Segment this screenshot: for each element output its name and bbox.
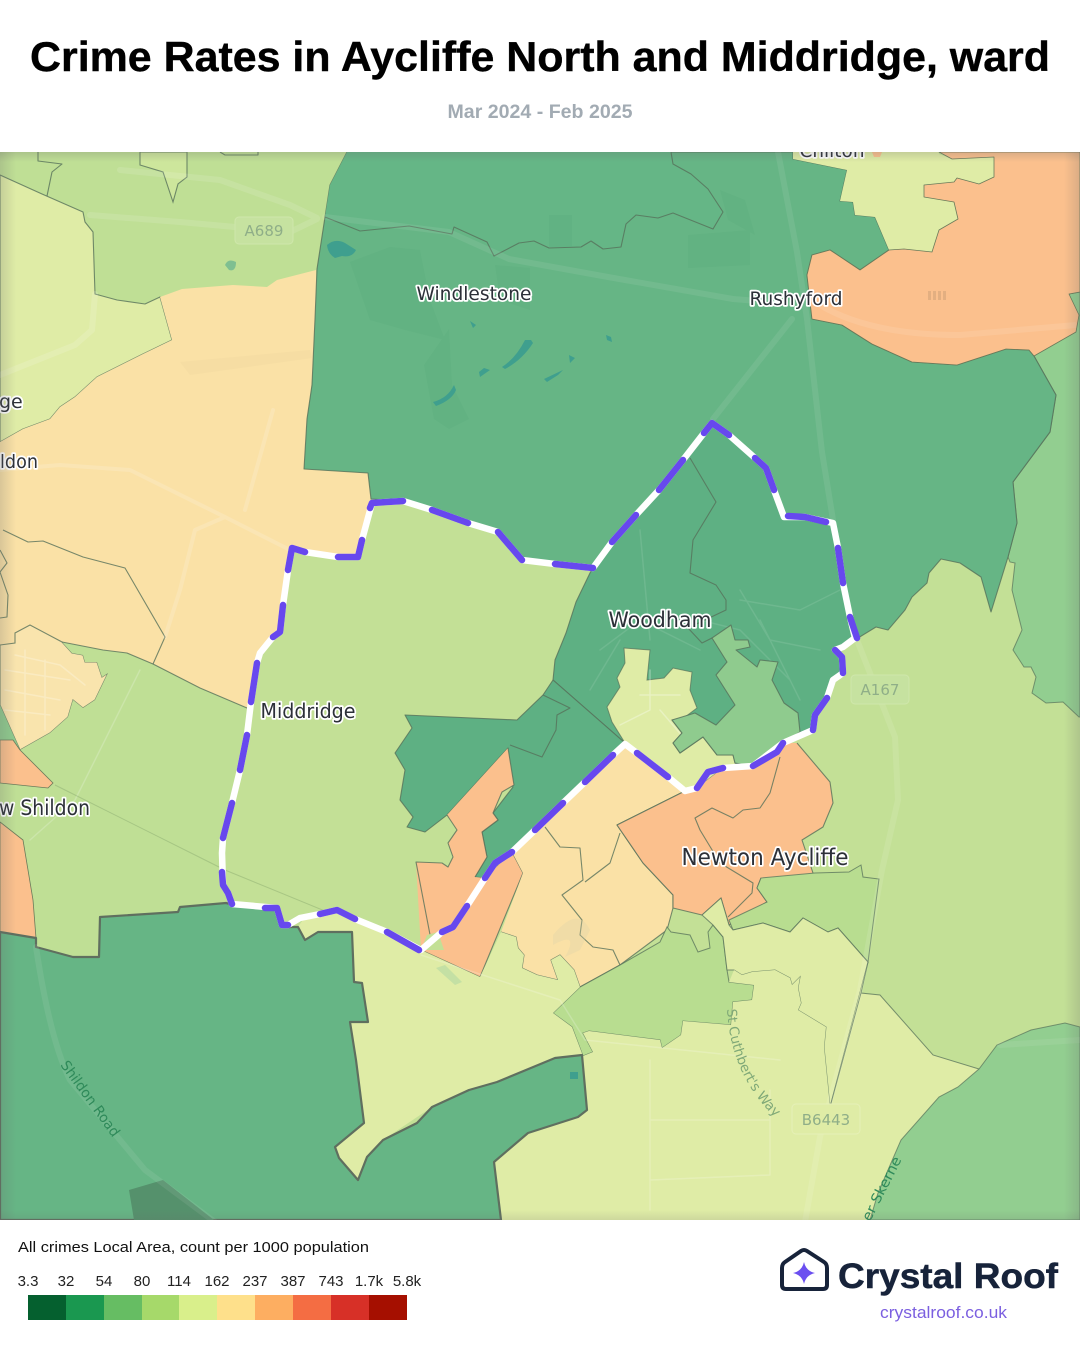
boundary white line — [222, 423, 855, 950]
place label: Newton Aycliffe: Newton Aycliffe — [682, 845, 848, 871]
area: Woodham mid green — [672, 625, 800, 766]
area: Woodham dark green — [553, 422, 855, 791]
legend tick labels — [18, 1273, 422, 1290]
area: south pale — [298, 898, 979, 1220]
map edge fade — [0, 152, 1080, 1220]
road badge: B6443: B6443 — [802, 1111, 850, 1129]
area: north dark green (Windlestone) — [304, 152, 1056, 638]
legend — [18, 1239, 422, 1320]
legend tick labels: 387 — [280, 1273, 306, 1290]
ward boundary: Aycliffe North and Middridge — [222, 423, 857, 950]
legend tick labels: 32 — [58, 1273, 74, 1290]
area: small orange patches at west edge — [0, 740, 53, 938]
area: Newton Aycliffe cream — [501, 743, 685, 987]
road: A167 corridor — [805, 640, 898, 1222]
area: south centre mid green — [553, 865, 879, 1056]
road badge: A689: A689 — [245, 222, 283, 240]
place label: Chilton: Chilton — [800, 140, 864, 162]
area: south-west dark green — [0, 903, 587, 1222]
area: Woodham dark green south-west — [395, 680, 625, 878]
logo url: crystalroof.co.uk — [880, 1304, 1008, 1322]
place label: clipped west ldon: ldon — [0, 451, 38, 473]
area: north-east pale — [793, 152, 994, 252]
legend tick labels: 1.7k — [355, 1273, 384, 1290]
legend tick labels: 237 — [242, 1273, 268, 1290]
legend colour scale — [28, 1295, 407, 1320]
river name: Skerne: er Skerne — [859, 1154, 905, 1224]
boundary purple dashes — [222, 423, 857, 950]
legend tick labels: 54 — [96, 1273, 112, 1290]
area: west street-patterned cream — [0, 625, 108, 750]
area: south-east mid green — [870, 1023, 1080, 1220]
area: east mid green — [1008, 292, 1080, 717]
icon: house with star — [782, 1250, 827, 1289]
road badge: A167 — [851, 675, 909, 704]
area: north-east orange (Rushyford) — [807, 152, 1080, 365]
legend tick labels: 80 — [134, 1273, 150, 1290]
logo wordmark: Crystal Roof — [838, 1257, 1058, 1296]
area: west light green (New Shildon) — [20, 642, 324, 910]
legend tick labels: 743 — [318, 1273, 344, 1290]
area: Newton Aycliffe orange west — [416, 748, 523, 977]
legend tick labels: 114 — [167, 1273, 191, 1290]
area: west pale band — [0, 175, 172, 442]
place label: Woodham: Woodham — [608, 608, 712, 632]
road name: Shildon Road: Shildon Road — [57, 1058, 123, 1140]
place label: Windlestone: Windlestone — [416, 283, 532, 305]
road badge: B6443 — [792, 1104, 860, 1134]
area: small mid green at west edge — [0, 705, 20, 750]
road badge: A689 — [235, 217, 293, 244]
logo: Crystal Roof — [782, 1250, 1058, 1322]
area: Woodham pale — [606, 648, 737, 788]
legend title: All crimes Local Area, count per 1000 population — [18, 1239, 369, 1256]
road badge: A167: A167 — [861, 681, 899, 699]
area: west cream — [0, 270, 371, 708]
place label: Rushyford: Rushyford — [750, 288, 842, 310]
legend tick labels: 162 — [204, 1273, 230, 1290]
place label: Middridge: Middridge — [260, 699, 356, 723]
subtitle: date range: Mar 2024 - Feb 2025 — [448, 102, 633, 123]
area: north-west light green — [37, 152, 320, 270]
legend tick labels: 3.3 — [18, 1273, 38, 1290]
area: Newton Aycliffe orange east — [617, 743, 833, 925]
path name: St Cuthbert's Way: St Cuthbert's Way — [727, 1010, 780, 1116]
legend tick labels: 5.8k — [393, 1273, 422, 1290]
title: Crime Rates in Aycliffe North and Middridge, ward — [30, 33, 1050, 80]
place label: New Shildon: w Shildon — [0, 796, 90, 820]
